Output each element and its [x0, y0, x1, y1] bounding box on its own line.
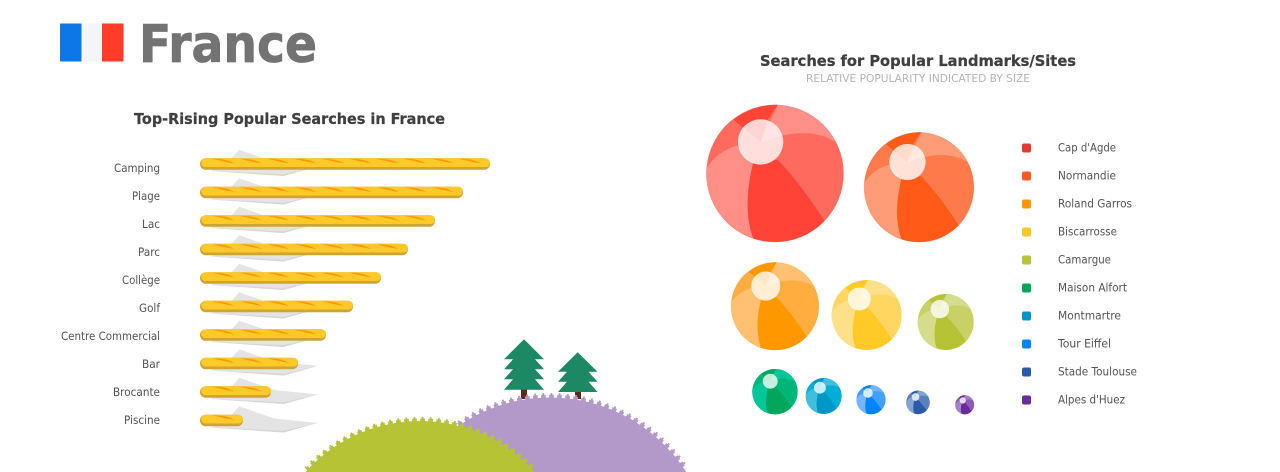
ball: Tour Eiffel — [856, 385, 886, 414]
legend item: Camargue: Camargue — [1058, 252, 1111, 266]
legend item: Tour Eiffel: Tour Eiffel — [1057, 336, 1111, 350]
row: Collège: Collège — [122, 273, 160, 287]
legend item: Maison Alfort — [1022, 280, 1127, 294]
row: Plage — [132, 178, 463, 204]
row: Brocante — [113, 378, 318, 404]
legend item: Cap d'Agde — [1022, 140, 1116, 154]
ball: Montmartre — [806, 378, 842, 414]
ball: Roland Garros — [731, 262, 819, 350]
baguette bar chart — [61, 150, 490, 432]
row: Piscine — [124, 406, 318, 432]
heading: landmarks: Searches for Popular Landmarks/Sites — [760, 52, 1076, 70]
ball: Normandie — [864, 132, 974, 242]
subheading: size note: RELATIVE POPULARITY INDICATED BY SIZE — [806, 72, 1030, 85]
hill: purple — [414, 397, 686, 472]
legend item: Roland Garros — [1022, 196, 1132, 210]
legend item: Tour Eiffel — [1022, 336, 1111, 350]
ball: Camargue — [918, 294, 974, 350]
row: Camping: Camping — [114, 161, 160, 175]
ball: Cap d'Agde — [706, 105, 844, 242]
title: France: France — [139, 15, 317, 75]
legend item: Montmartre — [1022, 308, 1121, 322]
row: Parc: Parc — [138, 245, 160, 259]
row: Centre Commercial — [61, 321, 326, 347]
row: Camping — [114, 150, 490, 176]
row: Bar: Bar — [142, 357, 160, 371]
row: Collège — [122, 264, 381, 290]
row: Brocante: Brocante — [113, 385, 160, 399]
legend item: Stade Toulouse: Stade Toulouse — [1058, 364, 1137, 378]
ball: Maison Alfort — [752, 369, 798, 414]
flag of France — [60, 24, 124, 62]
row: Lac: Lac — [142, 217, 160, 231]
legend item: Stade Toulouse — [1022, 364, 1137, 378]
heading: top-rising searches: Top-Rising Popular Searches in France — [134, 110, 445, 128]
row: Plage: Plage — [132, 189, 160, 203]
tree: large — [504, 339, 544, 399]
legend item: Biscarrosse — [1022, 224, 1117, 238]
legend — [1022, 140, 1137, 406]
row: Golf: Golf — [139, 301, 161, 315]
row: Centre Commercial: Centre Commercial — [61, 329, 160, 343]
hill: green — [306, 421, 534, 472]
row: Lac — [142, 207, 435, 233]
legend item: Camargue — [1022, 252, 1111, 266]
ball: Biscarrosse — [832, 280, 902, 350]
legend item: Normandie — [1022, 168, 1116, 182]
legend item: Roland Garros: Roland Garros — [1058, 196, 1132, 210]
legend item: Maison Alfort: Maison Alfort — [1058, 280, 1127, 294]
ball: Alpes d'Huez — [955, 395, 974, 414]
legend item: Alpes d'Huez: Alpes d'Huez — [1058, 392, 1125, 406]
legend item: Normandie: Normandie — [1058, 168, 1116, 182]
legend item: Alpes d'Huez — [1022, 392, 1125, 406]
row: Bar — [142, 349, 318, 376]
ball: Stade Toulouse — [906, 391, 930, 414]
row: Golf — [139, 292, 353, 318]
legend item: Cap d'Agde: Cap d'Agde — [1058, 140, 1116, 154]
row: Parc — [138, 235, 408, 262]
row: Piscine: Piscine — [124, 413, 160, 427]
legend item: Biscarrosse: Biscarrosse — [1058, 224, 1117, 238]
tree: small — [558, 352, 598, 399]
legend item: Montmartre: Montmartre — [1058, 308, 1121, 322]
